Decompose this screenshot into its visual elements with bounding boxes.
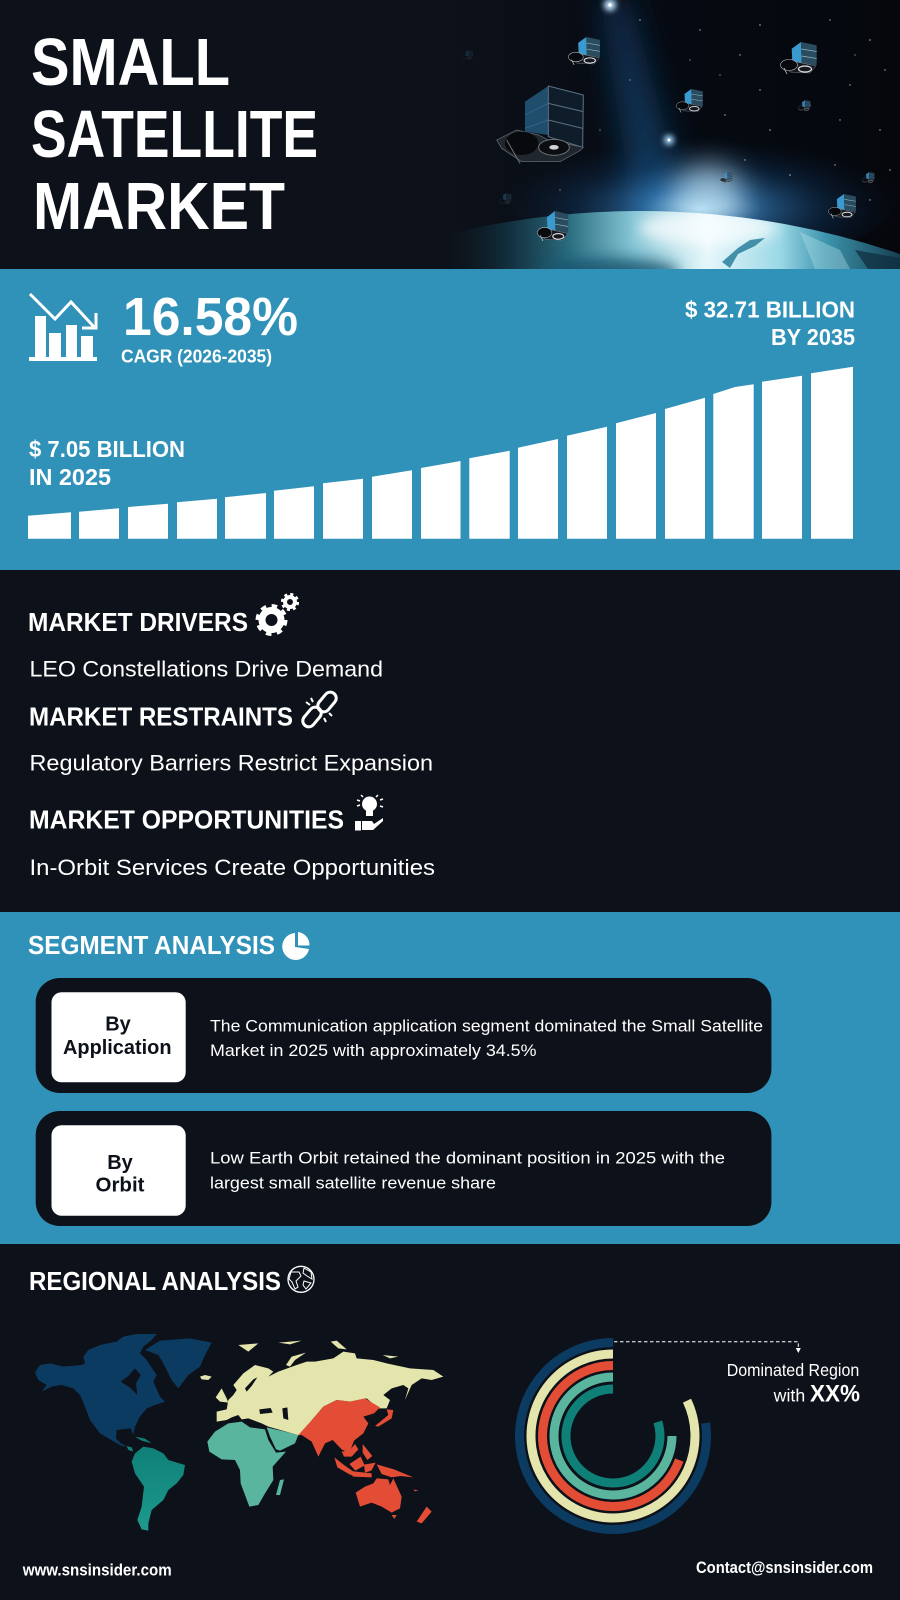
title: SATELLITE xyxy=(31,97,318,172)
description: largest small satellite revenue share xyxy=(210,1173,496,1192)
stars xyxy=(559,19,891,201)
label box: Application xyxy=(63,1037,172,1059)
heading: market drivers: MARKET DRIVERS xyxy=(28,609,248,637)
start value: IN 2025 xyxy=(29,464,111,490)
text: driver: LEO Constellations Drive Demand xyxy=(30,656,383,682)
africa and arabia xyxy=(207,1422,298,1507)
earth xyxy=(468,211,900,269)
CAGR label: CAGR (2026-2035) xyxy=(121,346,272,366)
footer: website: www.snsinsider.com xyxy=(22,1561,172,1580)
header: space image xyxy=(462,0,900,269)
small satellites xyxy=(462,37,874,241)
callout: dominated region xyxy=(727,1360,860,1408)
caribbean xyxy=(127,1437,152,1452)
icon: globe xyxy=(288,1266,314,1292)
CAGR value: 16.58% xyxy=(123,287,298,347)
card: by application xyxy=(36,978,771,1093)
radial chart xyxy=(520,1342,707,1530)
inland seas xyxy=(245,1377,288,1420)
description xyxy=(210,1016,763,1060)
world map xyxy=(35,1334,443,1531)
hudson bay xyxy=(121,1368,141,1395)
americas xyxy=(35,1334,212,1531)
heading: market restraints: MARKET RESTRAINTS xyxy=(29,704,293,732)
description: The Communication application segment dominated the Small Satellite xyxy=(210,1016,763,1036)
end value: BY 2035 xyxy=(771,324,855,350)
end value xyxy=(685,296,855,350)
title: MARKET xyxy=(33,169,285,244)
panel: market size xyxy=(0,269,900,570)
label box: By xyxy=(107,1152,134,1174)
card: by orbit xyxy=(36,1111,771,1226)
start value xyxy=(29,436,185,490)
icon: bulb in hand xyxy=(355,795,383,830)
north america and greenland xyxy=(35,1334,212,1447)
description: Market in 2025 with approximately 34.5% xyxy=(210,1041,536,1060)
title: SMALL xyxy=(31,25,230,100)
title xyxy=(31,25,318,244)
label box xyxy=(52,992,186,1082)
description: Low Earth Orbit retained the dominant position in 2025 with the xyxy=(210,1148,725,1167)
text: restraint: Regulatory Barriers Restrict Expansion xyxy=(30,750,433,776)
panel: regional analysis xyxy=(29,1266,860,1531)
start value: $ 7.05 BILLION xyxy=(29,436,185,462)
icon: pie chart xyxy=(282,932,310,960)
callout: dominated region: XX% xyxy=(810,1381,860,1408)
heading: market opportunities: MARKET OPPORTUNITIES xyxy=(29,806,344,834)
callout: dominated region: with xyxy=(773,1386,805,1406)
description xyxy=(210,1148,725,1192)
panel: segment analysis xyxy=(0,912,900,1244)
iceland xyxy=(200,1375,212,1380)
bar chart xyxy=(28,367,853,539)
icon: gears xyxy=(258,594,298,634)
big satellite xyxy=(497,86,583,163)
eastern hemisphere xyxy=(207,1341,443,1523)
label box: By xyxy=(105,1014,132,1036)
label box: Orbit xyxy=(96,1175,145,1197)
asia pacific xyxy=(298,1398,432,1523)
panel: market dynamics xyxy=(28,594,435,880)
icon: chart with arrow xyxy=(29,294,97,361)
footer: contact: Contact@snsinsider.com xyxy=(696,1558,873,1577)
end value: $ 32.71 BILLION xyxy=(685,296,855,322)
europe and northern asia xyxy=(216,1341,443,1435)
text: opportunity: In-Orbit Services Create Opportunities xyxy=(30,855,435,880)
dashed leader arrow xyxy=(614,1342,801,1353)
callout: dominated region: Dominated Region xyxy=(727,1360,859,1380)
south america xyxy=(132,1447,185,1531)
heading: regional analysis: REGIONAL ANALYSIS xyxy=(29,1268,281,1296)
icon: broken chain xyxy=(300,690,339,729)
label box xyxy=(52,1125,186,1216)
heading: segment analysis: SEGMENT ANALYSIS xyxy=(28,932,275,960)
